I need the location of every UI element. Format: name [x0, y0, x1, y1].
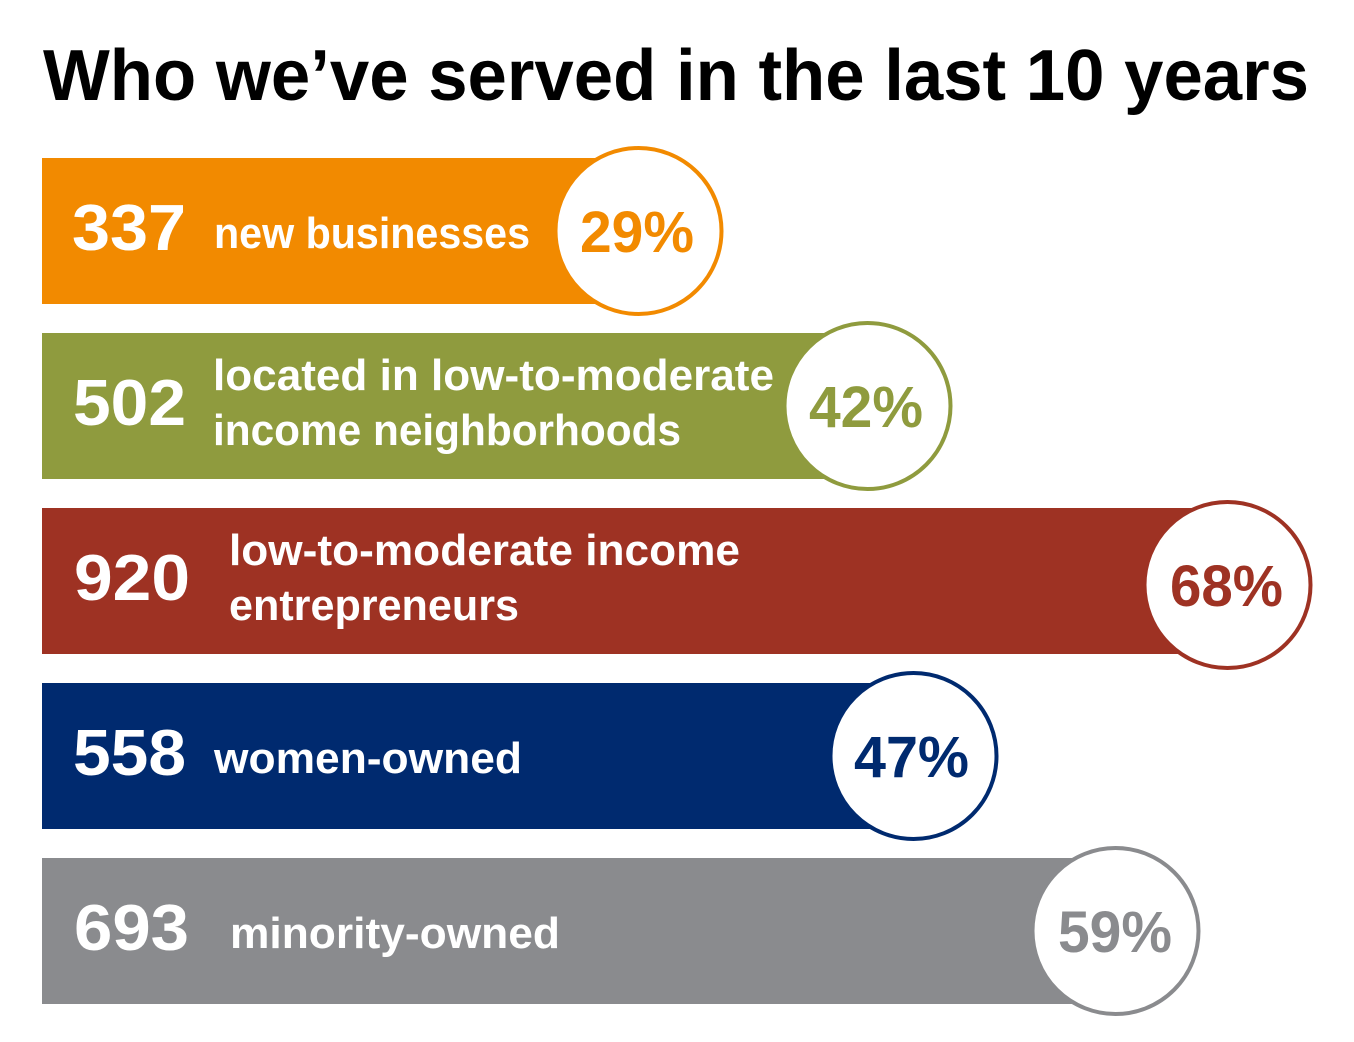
- percent: 29%: 29%: [580, 200, 694, 265]
- number: 337: 337: [72, 191, 186, 264]
- bar: minority-owned: [42, 858, 1082, 1004]
- label: entrepreneurs: entrepreneurs: [229, 581, 519, 630]
- bar: new businesses: [42, 158, 602, 304]
- circle: 47%: [830, 673, 996, 839]
- label: entrepreneurs: low-to-moderate income: [229, 526, 740, 575]
- number: 693: 693: [74, 891, 189, 964]
- number: 558: 558: [73, 716, 186, 789]
- label: women-owned: women-owned: [213, 734, 522, 783]
- circle: 68%: [1144, 502, 1310, 668]
- percent: 47%: 47%: [854, 725, 969, 790]
- title: Who we’ve served in the last 10 years: [43, 36, 1309, 116]
- label: entrepreneurs: [229, 526, 740, 630]
- bar: entrepreneurs: [42, 508, 1192, 654]
- number: 920: 920: [74, 541, 190, 614]
- percent: 42%: 42%: [809, 375, 923, 440]
- percent: 68%: 68%: [1170, 554, 1283, 619]
- panel: new businesses: [42, 148, 722, 314]
- panel: minority-owned: [42, 848, 1198, 1014]
- bar: women-owned: [42, 683, 878, 829]
- label: new businesses: new businesses: [214, 209, 530, 258]
- percent: 59%: 59%: [1058, 900, 1172, 965]
- label: minority-owned: minority-owned: [230, 909, 560, 958]
- label: neighborhoods: located in low-to-moderate: [213, 351, 774, 400]
- circle: 59%: [1032, 848, 1198, 1014]
- bar: neighborhoods: [42, 333, 832, 479]
- panel: women-owned: [42, 673, 996, 839]
- label: neighborhoods: income neighborhoods: [213, 406, 681, 455]
- number: 502: 502: [73, 366, 186, 439]
- circle: 29%: [556, 148, 722, 314]
- panel: low-to-moderate neighborhoods: [42, 323, 950, 489]
- label: neighborhoods: [213, 351, 774, 455]
- panel: entrepreneurs: [42, 502, 1310, 668]
- circle: 42%: [784, 323, 950, 489]
